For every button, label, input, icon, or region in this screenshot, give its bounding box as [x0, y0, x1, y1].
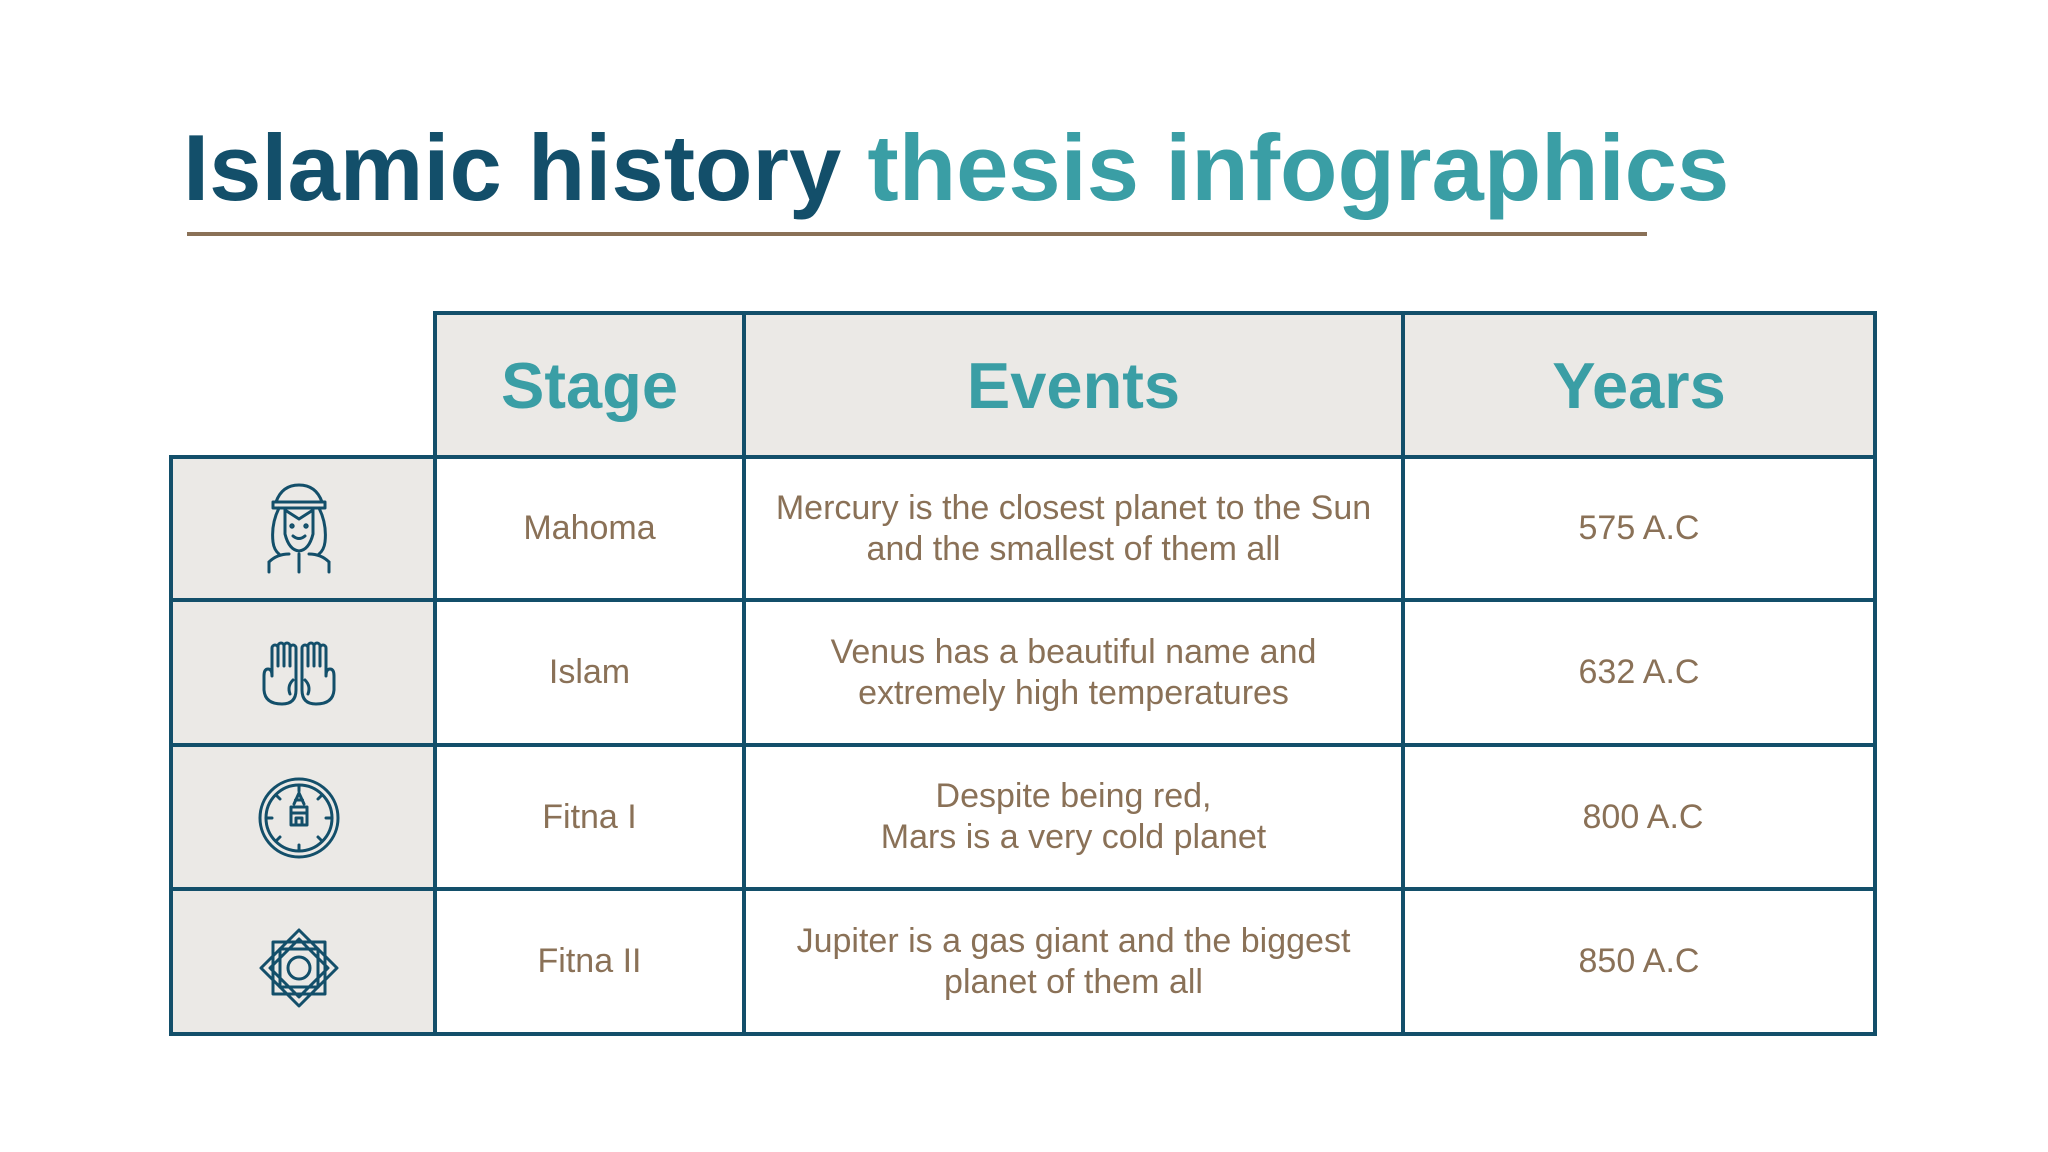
table: 575 A.C	[1578, 509, 1699, 547]
header: Stage	[435, 313, 744, 457]
icon: qibla compass	[260, 779, 338, 857]
header: Events: Events	[967, 348, 1180, 422]
table: Mercury is the closest planet to the Sun	[776, 488, 1371, 526]
table: Venus has a beautiful name and	[831, 632, 1316, 670]
icon: eight-pointed star	[261, 930, 337, 1006]
icon: raised hands	[264, 643, 334, 704]
row 3: Fitna I	[542, 798, 637, 836]
title: Islamic history thesis infographics	[183, 115, 1729, 220]
row 4: Fitna II	[538, 942, 641, 980]
table: Despite being red,	[936, 777, 1211, 815]
table: 850 A.C	[1578, 942, 1699, 980]
header: Events	[744, 313, 1403, 457]
grid lines	[433, 311, 1877, 315]
table: 800 A.C	[1582, 798, 1703, 836]
table: Jupiter is a gas giant and the biggest	[797, 922, 1350, 960]
header: Years	[1403, 313, 1875, 457]
row 2: Islam	[549, 653, 630, 691]
icon: man with headdress	[269, 485, 329, 572]
row 1: Mahoma	[523, 509, 656, 547]
header: Stage: Stage	[501, 348, 678, 422]
icon column background	[171, 457, 435, 1034]
table: 632 A.C	[1578, 653, 1699, 691]
table: extremely high temperatures	[858, 674, 1289, 712]
table: planet of them all	[944, 962, 1203, 1000]
table: and the smallest of them all	[867, 530, 1280, 568]
header: Years: Years	[1552, 348, 1726, 422]
table: Mars is a very cold planet	[881, 818, 1266, 856]
